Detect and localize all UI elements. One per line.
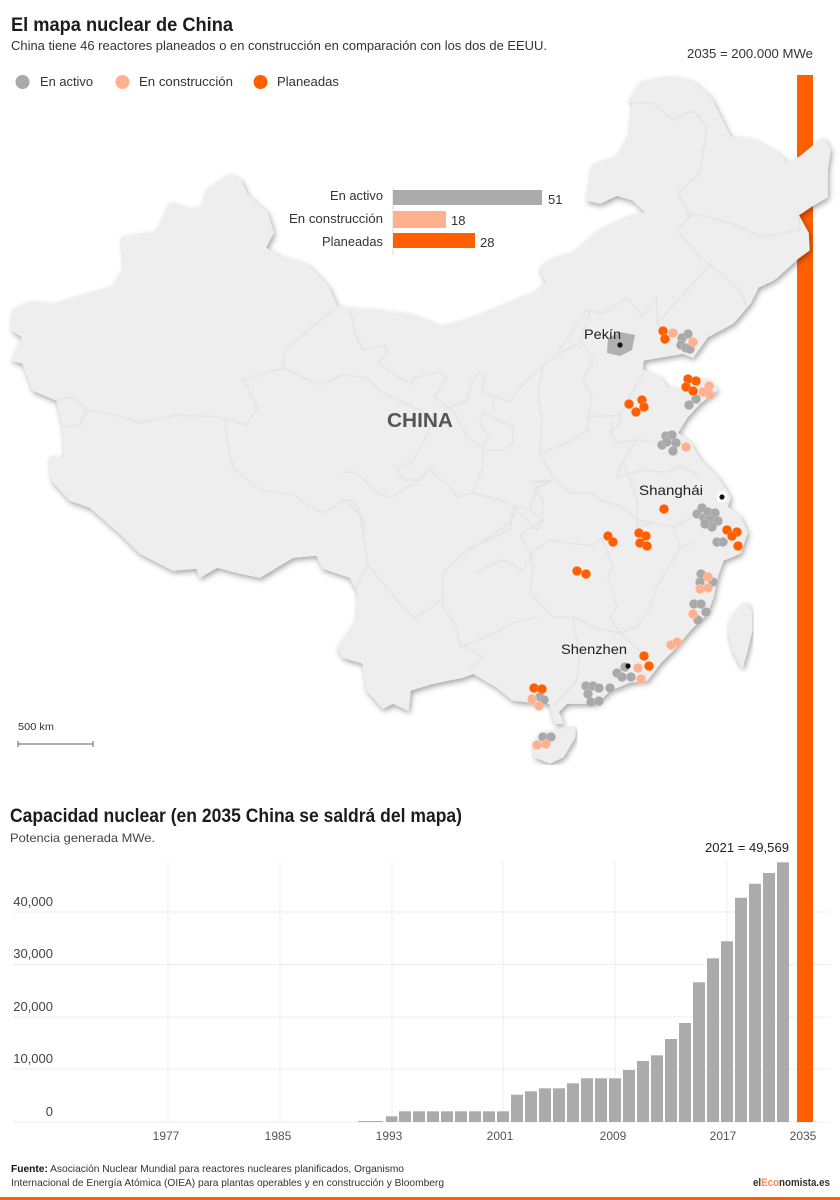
map scale [18, 722, 93, 747]
subheading: capacity chart: Potencia generada MWe. [10, 831, 155, 845]
legend [16, 74, 339, 89]
x axis labels: 1977 [153, 1129, 180, 1143]
y axis labels: 0 [46, 1104, 53, 1119]
city: Shenzhen [561, 641, 631, 669]
province borders [57, 103, 800, 707]
map of China [12, 77, 830, 763]
x axis labels: 1985 [265, 1129, 292, 1143]
label: 2021 capacity: 2021 = 49,569 [705, 840, 789, 855]
inset bar chart [289, 188, 562, 255]
plants: inland planned [572, 504, 669, 579]
island: Hainan [533, 727, 575, 763]
mainland outline [12, 77, 830, 723]
heading: capacity chart: Capacidad nuclear (en 2035 China se saldrá del mapa) [10, 806, 462, 827]
x axis labels: 2009 [600, 1129, 627, 1143]
inset bar chart: 28 [480, 235, 494, 250]
island: Taiwan [728, 602, 752, 668]
source note [11, 1163, 444, 1189]
city: Pekín [584, 326, 623, 348]
y axis labels: 40,000 [13, 894, 53, 909]
source note: Internacional de Energía Atómica (OIEA) para plantas operables y en construcción y Bloomberg [11, 1177, 444, 1189]
city: Pekín: Pekín [584, 326, 621, 342]
map scale: 500 km [18, 722, 54, 733]
city: Shanghái [639, 482, 725, 500]
inset bar chart: 18 [451, 213, 465, 228]
y axis labels: 30,000 [13, 946, 53, 961]
plants: Jiangsu [657, 430, 691, 456]
plants: Hainan [532, 732, 556, 750]
bar: 2035 capacity [797, 75, 813, 1122]
legend: En activo [40, 74, 93, 89]
bar chart: yearly capacity [358, 862, 789, 1122]
brand logo: elEconomista.es [753, 1177, 830, 1189]
x axis labels: 2017 [710, 1129, 737, 1143]
legend: Planeadas [277, 74, 339, 89]
x axis labels: 1993 [376, 1129, 403, 1143]
x axis labels [153, 1129, 817, 1143]
label: CHINA: CHINA [387, 410, 453, 432]
inset bar chart: Planeadas [322, 234, 383, 249]
x axis labels: 2035 [790, 1129, 817, 1143]
x axis labels: 2001 [487, 1129, 514, 1143]
city: Shanghái: Shanghái [639, 482, 703, 498]
plants: Guangdong [581, 651, 654, 707]
title: El mapa nuclear de China [11, 15, 233, 36]
plants: Liaoning [658, 326, 698, 354]
plants: Shandong [681, 374, 715, 410]
chart grid [13, 862, 830, 1122]
footer strip [0, 1197, 840, 1200]
y axis labels [13, 894, 53, 1119]
region: Beijing [607, 332, 635, 356]
plants: Henan [624, 395, 649, 417]
inset bar chart: En construcción [289, 211, 383, 226]
subtitle: China tiene 46 reactores planeados o en construcción en comparación con los dos de EEUU. [11, 39, 547, 53]
city: Shenzhen: Shenzhen [561, 641, 627, 657]
source note: Fuente: Asociación Nuclear Mundial para reactores nucleares planificados, Organismo [11, 1163, 404, 1175]
plants: Fujian [666, 569, 718, 650]
inset bar chart: 51 [548, 192, 562, 207]
label: 2035 capacity: 2035 = 200.000 MWe [687, 46, 813, 61]
region: Shanghai [716, 492, 728, 502]
legend: En construcción [139, 74, 233, 89]
inset bar chart: En activo [330, 188, 383, 203]
y axis labels: 20,000 [13, 999, 53, 1014]
plants: Zhejiang [692, 503, 743, 551]
y axis labels: 10,000 [13, 1051, 53, 1066]
plants: Guangxi [527, 683, 549, 711]
